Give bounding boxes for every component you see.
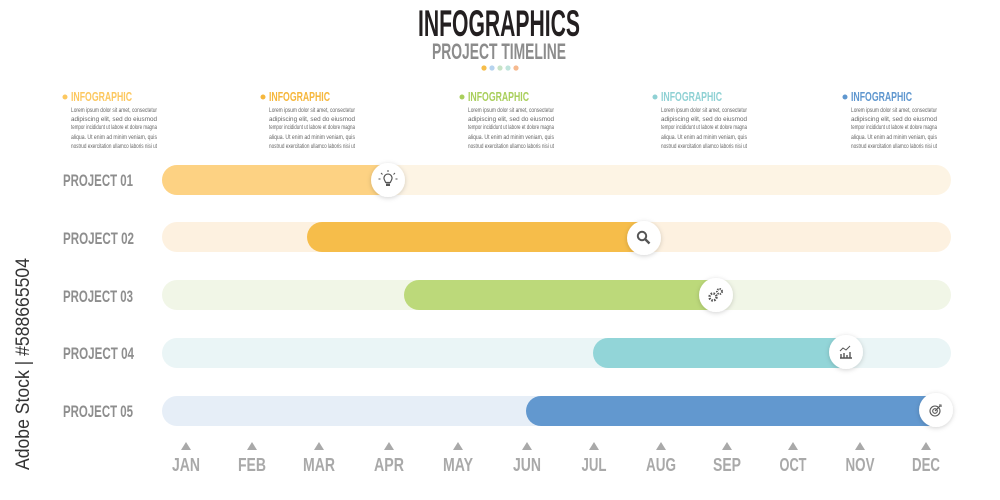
month axis: FEB xyxy=(238,455,266,475)
icon: magnifier xyxy=(627,221,661,255)
info column 5: INFOGRAPHIC xyxy=(851,89,912,104)
info column 4: adipiscing elit, sed do eiusmod xyxy=(661,117,747,123)
info column 5: aliqua. Ut enim ad minim veniam, quis xyxy=(851,135,937,141)
icon: target xyxy=(919,393,953,427)
info column 4: INFOGRAPHIC xyxy=(661,89,722,104)
info column 2: adipiscing elit, sed do eiusmod xyxy=(269,117,355,123)
info column 5: nostrud exercitation ullamco laboris nisi ut xyxy=(851,144,937,150)
month axis: MAY xyxy=(443,455,473,475)
info column 5: adipiscing elit, sed do eiusmod xyxy=(851,117,937,123)
row: project 02: PROJECT 02 xyxy=(63,229,134,248)
info column 2 xyxy=(260,89,355,150)
info column 2: aliqua. Ut enim ad minim veniam, quis xyxy=(269,135,355,141)
info column 1: nostrud exercitation ullamco laboris nisi ut xyxy=(71,144,157,150)
info column 3: adipiscing elit, sed do eiusmod xyxy=(468,117,554,123)
month axis xyxy=(172,442,940,475)
title: PROJECT TIMELINE xyxy=(432,39,566,64)
info column 2: INFOGRAPHIC xyxy=(269,89,330,104)
month axis: OCT xyxy=(780,455,806,475)
watermark vertical text: Adobe Stock | #588665504 xyxy=(13,258,34,470)
month axis: DEC xyxy=(912,455,940,475)
info column 2: tempor incididunt ut labore et dolore magna xyxy=(269,125,355,131)
icon: gears xyxy=(699,278,733,312)
info column 3: aliqua. Ut enim ad minim veniam, quis xyxy=(468,135,554,141)
info column 5: Lorem ipsum dolor sit amet, consectetur xyxy=(851,108,937,114)
info column 3: INFOGRAPHIC xyxy=(468,89,529,104)
info column 2: nostrud exercitation ullamco laboris nisi ut xyxy=(269,144,355,150)
info column 1: adipiscing elit, sed do eiusmod xyxy=(71,117,157,123)
info column 3 xyxy=(460,89,554,150)
row: project 03 xyxy=(63,278,951,312)
info column 4 xyxy=(652,89,747,150)
info column 1: tempor incididunt ut labore et dolore magna xyxy=(71,125,157,131)
month axis: AUG xyxy=(646,455,676,475)
info column 2: Lorem ipsum dolor sit amet, consectetur xyxy=(269,108,355,114)
month axis: JUL xyxy=(582,455,606,475)
info column 1: INFOGRAPHIC xyxy=(71,89,132,104)
info column 4: nostrud exercitation ullamco laboris nisi ut xyxy=(661,144,747,150)
info column 4: Lorem ipsum dolor sit amet, consectetur xyxy=(661,108,747,114)
month axis: MAR xyxy=(303,455,335,475)
row: project 01 xyxy=(63,163,951,197)
month axis: SEP xyxy=(713,455,741,475)
row: project 04 xyxy=(63,335,951,369)
info column 5 xyxy=(842,89,937,150)
info column 5: tempor incididunt ut labore et dolore magna xyxy=(851,125,937,131)
month axis: JAN xyxy=(172,455,200,475)
icon: chart xyxy=(829,335,863,369)
icon: light bulb xyxy=(371,163,405,197)
info column 3: nostrud exercitation ullamco laboris nisi ut xyxy=(468,144,554,150)
info column 1 xyxy=(62,89,157,150)
month axis: APR xyxy=(374,455,404,475)
info column 1: aliqua. Ut enim ad minim veniam, quis xyxy=(71,135,157,141)
info column 3: Lorem ipsum dolor sit amet, consectetur xyxy=(468,108,554,114)
row: project 03: PROJECT 03 xyxy=(63,287,133,306)
row: project 05 xyxy=(63,393,953,427)
title xyxy=(418,3,580,71)
row: project 02 xyxy=(63,221,951,255)
month axis: JUN xyxy=(513,455,541,475)
title: INFOGRAPHICS xyxy=(418,3,580,44)
info column 4: tempor incididunt ut labore et dolore magna xyxy=(661,125,747,131)
info column 1: Lorem ipsum dolor sit amet, consectetur xyxy=(71,108,157,114)
row: project 04: PROJECT 04 xyxy=(63,344,134,363)
info column 4: aliqua. Ut enim ad minim veniam, quis xyxy=(661,135,747,141)
row: project 01: PROJECT 01 xyxy=(63,171,133,190)
month axis: NOV xyxy=(846,455,874,475)
row: project 05: PROJECT 05 xyxy=(63,402,133,421)
info column 3: tempor incididunt ut labore et dolore magna xyxy=(468,125,554,131)
